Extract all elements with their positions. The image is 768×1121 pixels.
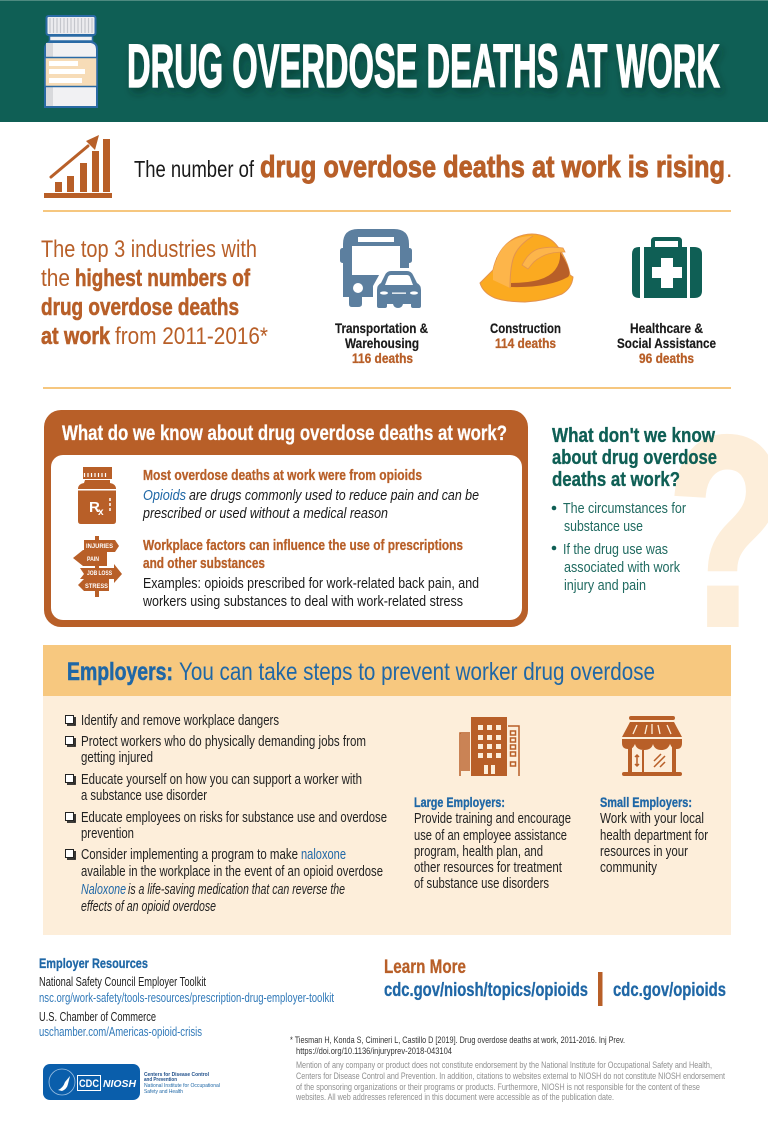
checklist: getting injured (81, 749, 153, 766)
text: small employers: resources in your (600, 843, 688, 860)
citation: https://doi.org/10.1136/injuryprev-2018-043104 (296, 1046, 452, 1057)
top 3 industries heading (41, 236, 268, 350)
top 3 industries heading: the (41, 265, 70, 292)
bullets: The circumstances for (563, 500, 686, 517)
checklist: a substance use disorder (81, 787, 207, 804)
text: large employers (414, 794, 571, 892)
learn more: cdc.gov/niosh/topics/opioids (384, 980, 588, 1001)
text: opioids: prescribed or used without a medical reason (142, 505, 388, 522)
text: large employers: other resources for treatment (414, 859, 563, 876)
checklist: prevention (81, 825, 134, 842)
industry label: Social Assistance (617, 335, 716, 351)
icon: signpost: INJURIES (86, 544, 113, 550)
checklist: Naloxone (81, 881, 126, 898)
icon: signpost: JOB LOSS (87, 571, 112, 577)
header banner (0, 0, 768, 122)
text: small employers: Small Employers: (600, 794, 692, 810)
icon: signpost: STRESS (85, 584, 108, 590)
top 3 industries heading: The top 3 industries with (41, 236, 257, 263)
text: small employers: community (600, 859, 657, 876)
disclaimer: websites. All web addresses referenced in this document were accessible as of the publication date. (295, 1092, 614, 1103)
statement text: . (726, 156, 732, 182)
industry label: Warehousing (345, 335, 419, 351)
employer resources: uschamber.com/Americas-opioid-crisis (39, 1025, 202, 1039)
top 3 industries heading: from 2011-2016* (115, 323, 268, 350)
heading: deaths at work? (552, 469, 680, 491)
industry label: Construction (490, 320, 561, 336)
icon: first aid kit (632, 237, 702, 298)
CDC NIOSH logo (43, 1064, 220, 1100)
employers heading: Employers: (67, 658, 173, 686)
employers heading: You can take steps to prevent worker drug overdose (179, 658, 655, 686)
checklist: effects of an opioid overdose (81, 898, 216, 915)
icon: rx bottle (78, 467, 116, 524)
bullets: injury and pain (564, 577, 646, 594)
industry: healthcare (617, 237, 716, 366)
text: workplace factors: and other substances (143, 555, 265, 572)
CDC NIOSH logo: and Prevention (144, 1077, 178, 1083)
text: small employers: Work with your local (600, 810, 704, 827)
employer resources: Employer Resources (39, 955, 148, 971)
CDC NIOSH logo: National Institute for Occupational (144, 1083, 220, 1089)
icon: storefront (622, 716, 682, 776)
text: small employers: health department for (600, 827, 708, 844)
bullets (552, 500, 686, 594)
text: opioids: Most overdose deaths at work were from opioids (143, 467, 422, 484)
icon: pill bottle (45, 16, 97, 107)
text: opioids (142, 467, 479, 522)
checklist (66, 712, 387, 915)
employer resources (39, 955, 334, 1039)
icon: hard hat (480, 234, 573, 302)
checklist: Protect workers who do physically demanding jobs from (81, 733, 366, 750)
industry label (617, 320, 716, 366)
panel: employers (43, 645, 731, 935)
text: opioids: are drugs commonly used to reduce pain and can be (189, 487, 479, 504)
panel heading: What do we know about drug overdose deaths at work? (62, 422, 507, 445)
text: workplace factors (142, 537, 479, 610)
text: large employers: Large Employers: (414, 794, 505, 810)
heading: What don't we know (552, 425, 715, 447)
bullets: substance use (564, 518, 643, 535)
CDC NIOSH logo: CDC (79, 1078, 99, 1090)
learn more: cdc.gov/opioids (613, 980, 726, 1001)
text: large employers: program, health plan, and (414, 843, 543, 860)
industry label: Healthcare & (630, 320, 703, 336)
icon: signpost: PAIN (87, 557, 99, 563)
checklist: Consider implementing a program to make (81, 846, 298, 863)
employer resources: National Safety Council Employer Toolkit (39, 975, 206, 989)
panel: what do we know (44, 410, 528, 627)
bullets: If the drug use was (563, 541, 668, 558)
learn more (384, 957, 726, 1006)
text: workplace factors: Examples: opioids prescribed for work-related back pain, and (143, 575, 479, 592)
icon: bus and car (340, 229, 421, 308)
icon: rx bottle: x (98, 507, 104, 518)
top 3 industries heading: drug overdose deaths (41, 294, 239, 321)
employer resources: nsc.org/work-safety/tools-resources/prescription-drug-employer-toolkit (39, 991, 334, 1005)
industry label: Transportation & (335, 320, 428, 336)
industry: construction (480, 234, 573, 351)
icon: rx bottle: R (89, 499, 100, 516)
employers heading (67, 658, 655, 686)
statement text: The number of (134, 156, 254, 182)
checklist: Educate employees on risks for substance use and overdose (81, 809, 387, 826)
text: large employers: Provide training and encourage (414, 810, 571, 827)
icon: signpost (73, 536, 122, 597)
text: small employers (600, 794, 708, 876)
citation (290, 1035, 625, 1057)
text: workplace factors: workers using substances to deal with work-related stress (142, 593, 463, 610)
industry: transportation (335, 229, 428, 366)
heading: about drug overdose (552, 447, 717, 469)
checklist: naloxone (301, 846, 346, 863)
text: large employers: of substance use disorders (414, 875, 549, 892)
checklist: Educate yourself on how you can support a worker with (81, 771, 362, 788)
icon: office building (460, 717, 519, 776)
rising deaths statement (44, 135, 732, 198)
industry label: 96 deaths (639, 350, 694, 366)
checklist: Identify and remove workplace dangers (81, 712, 279, 729)
CDC NIOSH logo: NIOSH (103, 1079, 137, 1090)
heading (552, 425, 717, 491)
top 3 industries heading: highest numbers of (75, 265, 251, 292)
industry label: 114 deaths (495, 335, 556, 351)
industry label: 116 deaths (352, 350, 413, 366)
learn more: Learn More (384, 957, 466, 978)
icon: rising bar chart (44, 135, 112, 198)
employer resources: U.S. Chamber of Commerce (39, 1010, 156, 1024)
top 3 industries heading: at work (41, 323, 111, 350)
CDC NIOSH logo: Safety and Health (144, 1089, 183, 1095)
text: opioids: Opioids (143, 487, 186, 504)
industry label (335, 320, 428, 366)
text: workplace factors: Workplace factors can influence the use of prescriptions (143, 537, 463, 554)
text: large employers: use of an employee assistance (414, 827, 567, 844)
checklist: is a life-saving medication that can reverse the (128, 881, 345, 898)
panel: what don't we know (552, 425, 717, 594)
disclaimer (295, 1060, 725, 1103)
CDC NIOSH logo: Centers for Disease Control (144, 1072, 209, 1078)
citation: * Tiesman H, Konda S, Cimineri L, Castillo D [2019]. Drug overdose deaths at work, 2011-2016. Inj Prev. (290, 1035, 625, 1046)
bullets: associated with work (564, 559, 680, 576)
checklist: available in the workplace in the event of an opioid overdose (81, 863, 383, 880)
industry label (490, 320, 561, 351)
